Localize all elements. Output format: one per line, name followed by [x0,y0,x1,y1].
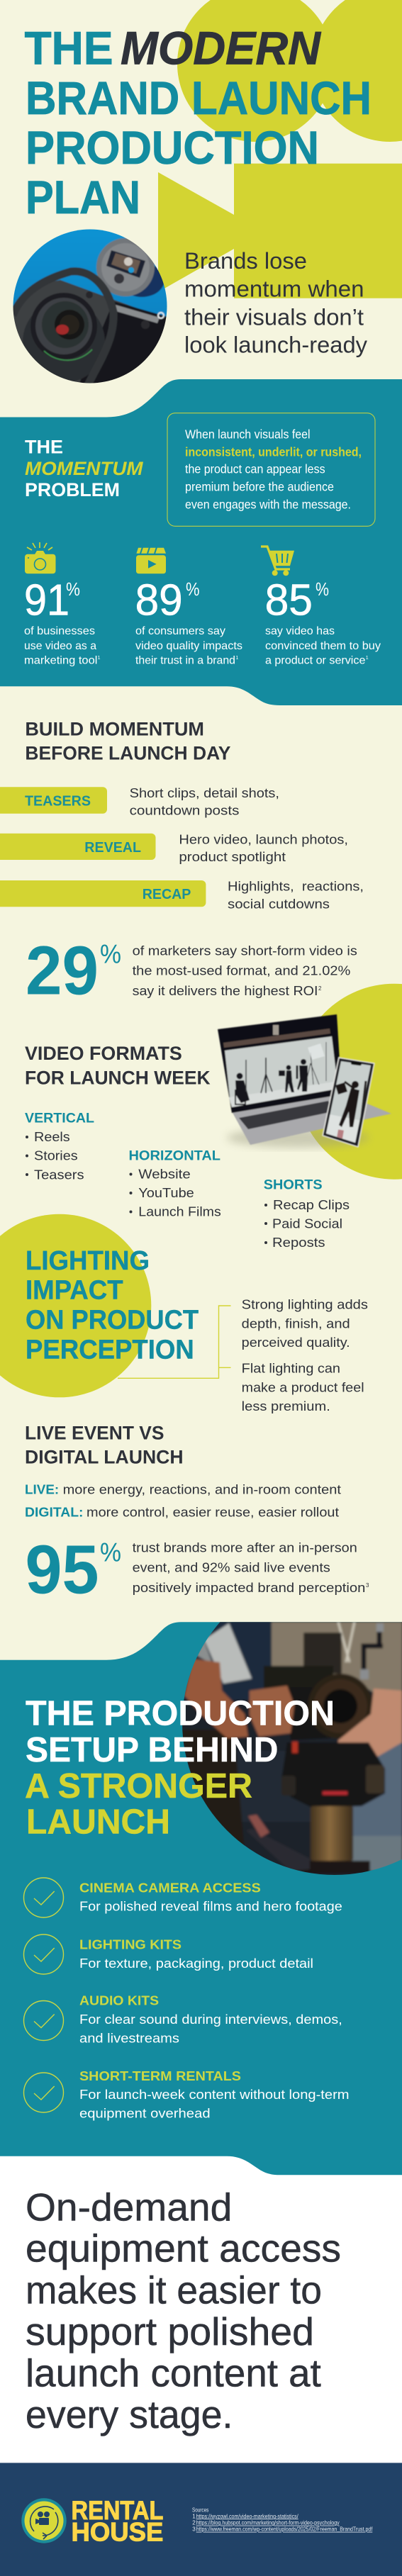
image: camera operator photo [182,1622,402,1875]
hero subheading: look launch-ready [184,332,368,358]
timeline: recap: social cutdowns [228,897,330,912]
momentum heading: MOMENTUM [25,458,143,479]
format list: horizontal: Website [138,1167,191,1182]
format list: vertical: Reels [34,1129,70,1144]
stat: 95 percent: 95 [26,1530,99,1608]
callout box [167,413,375,526]
momentum heading [25,436,143,500]
stat: 89 percent: 89 [135,576,183,625]
hero subheading: momentum when [184,276,364,301]
heading: video formats [25,1043,211,1088]
bracket connector [118,1306,231,1378]
title: PLAN [26,171,140,223]
lighting notes: make a product feel [242,1379,364,1394]
stat: 85 percent: say video has [265,625,335,637]
production heading: A STRONGER [25,1766,252,1805]
sources: https://www.freeman.com/wp-content/uploads/2025/02/Freeman_BrandTrust.pdf [196,2526,373,2533]
timeline: teasers: Short clips, detail shots, [130,785,279,800]
checklist: lighting kits: LIGHTING KITS [79,1937,182,1951]
checklist: short-term rentals: SHORT-TERM RENTALS [79,2068,241,2083]
callout box: When launch visuals feel [185,427,311,442]
stat: 85 percent: 1 [366,656,369,661]
sources [192,2507,373,2533]
stat: 89 percent: video quality impacts [135,640,242,652]
timeline: reveal: REVEAL [84,840,141,856]
checklist: audio kits: AUDIO KITS [79,1993,159,2007]
stat: 89 percent: 1 [235,656,238,661]
heading: live event vs digital: DIGITAL LAUNCH [25,1447,184,1468]
format list: shorts: Paid Social [272,1216,342,1231]
title: THE [24,22,113,74]
hero subheading: their visuals don’t [184,304,364,330]
format list: vertical: Stories [34,1148,78,1163]
hero subheading [184,248,368,358]
lime circle behind lighting heading [0,1214,151,1397]
image: laptop and phone mockup [218,1014,391,1148]
callout box: the product can appear less [185,462,325,476]
title: BRAND LAUNCH [26,72,372,124]
closing statement: support polished [26,2309,314,2353]
logo: rental house: RENTAL [71,2496,163,2525]
stat: 29 percent: 2 [318,985,322,992]
stat: 95 percent [26,1530,369,1608]
stat: 85 percent: 85 [265,576,313,625]
stat: 29 percent [26,932,357,1009]
hero decorative lime shapes [158,0,402,298]
checklist: lighting kits [24,1934,313,1974]
stat: 95 percent: 3 [366,1582,369,1589]
timeline: recap: RECAP [143,887,191,902]
stat: 95 percent: trust brands more after an in-person [133,1540,357,1555]
timeline: recap: Highlights, reactions, [228,879,364,894]
production heading: SETUP BEHIND [26,1730,278,1769]
stat: 29 percent: % [100,939,121,968]
sources: 1 [192,2513,196,2519]
stat: 91 percent: 1 [98,656,101,661]
momentum heading: THE [25,436,63,457]
heading: video formats: VIDEO FORMATS [25,1043,182,1064]
checklist: short-term rentals [24,2068,350,2120]
lighting notes: less premium. [242,1399,330,1413]
panel: production setup [0,1567,402,2175]
heading: lighting impact: LIGHTING [26,1246,150,1276]
icon: clapperboard [136,547,166,573]
checklist: short-term rentals: equipment overhead [79,2105,211,2120]
comparison lines: more energy, reactions, and in-room content [63,1482,341,1496]
heading: live event vs digital [25,1423,184,1468]
comparison lines: DIGITAL: [25,1505,84,1520]
stat: 91 percent: marketing tool [24,655,97,667]
stat: 85 percent: a product or service [265,655,365,667]
closing statement: every stage. [26,2392,233,2436]
heading: build momentum: BEFORE LAUNCH DAY [25,742,231,763]
timeline: reveal: product spotlight [179,849,286,864]
closing statement: launch content at [26,2351,321,2395]
timeline: reveal [0,831,348,864]
icon: shopping cart [261,547,294,576]
stat: 29 percent: 29 [26,932,99,1009]
format list: horizontal: Launch Films [138,1204,221,1219]
format list: shorts [264,1177,350,1250]
stat: 91 percent [24,576,101,667]
hero subheading: Brands lose [184,248,307,274]
lime circle behind devices [296,984,402,1180]
production heading: LAUNCH [26,1803,170,1842]
stat: 91 percent: of businesses [24,625,95,637]
format list: horizontal: YouTube [138,1185,194,1200]
stat: 95 percent: positively impacted brand perception [133,1580,365,1595]
heading: lighting impact: IMPACT [26,1276,123,1306]
checklist: lighting kits: For texture, packaging, product detail [79,1956,313,1971]
format list: shorts: Reposts [272,1235,325,1250]
format list: horizontal: HORIZONTAL [129,1148,220,1164]
closing statement: makes it easier to [26,2268,322,2312]
stat: 89 percent: their trust in a brand [135,655,235,667]
stat: 89 percent: of consumers say [135,625,225,637]
closing statement: On-demand [26,2185,232,2229]
format list: vertical [25,1110,94,1182]
checklist: cinema camera access: For polished reveal films and hero footage [79,1899,342,1914]
closing statement: equipment access [26,2227,341,2270]
checklist: audio kits: For clear sound during interviews, demos, [79,2012,342,2027]
callout box: even engages with the message. [185,497,351,511]
heading: build momentum: BUILD MOMENTUM [25,718,204,739]
checklist: cinema camera access: CINEMA CAMERA ACCESS [79,1880,261,1895]
sources: 3 [192,2526,196,2533]
title: MODERN [121,22,321,74]
heading: lighting impact: PERCEPTION [26,1335,194,1365]
icon: camera [25,542,55,573]
stat: 85 percent: convinced them to buy [265,640,381,652]
sources: 2 [192,2520,196,2526]
momentum heading: PROBLEM [25,479,120,500]
lighting notes: perceived quality. [242,1335,350,1350]
stat: 95 percent: event, and 92% said live events [133,1560,330,1575]
comparison lines: more control, easier reuse, easier rollout [86,1505,339,1520]
comparison lines [25,1482,341,1520]
lighting notes: Flat lighting can [242,1361,340,1376]
lighting notes: depth, finish, and [242,1316,350,1331]
format list: vertical: VERTICAL [25,1110,94,1126]
lighting notes: Strong lighting adds [242,1297,368,1312]
stat: 91 percent: use video as a [24,640,96,652]
timeline: recap [0,879,364,912]
heading: lighting impact: ON PRODUCT [26,1305,199,1335]
title: PRODUCTION [26,121,319,174]
stat: 95 percent: % [100,1538,121,1567]
stat: 29 percent: of marketers say short-form video is [133,943,357,958]
timeline: teasers: TEASERS [25,794,91,810]
checklist: audio kits [24,1993,342,2046]
format list: horizontal [129,1148,221,1219]
heading: build momentum [25,718,231,763]
stat: 89 percent [135,576,242,667]
logo: rental house [21,2496,163,2546]
comparison lines: LIVE: [25,1482,59,1496]
sources: https://blog.hubspot.com/marketing/short-form-video-psychology [196,2520,340,2526]
format list: shorts: SHORTS [264,1177,323,1192]
heading: video formats: FOR LAUNCH WEEK [25,1067,211,1088]
stat: 91 percent: % [66,578,80,600]
logo: rental house: HOUSE [71,2517,163,2546]
timeline: teasers [0,785,279,818]
checklist: audio kits: and livestreams [79,2031,179,2046]
stat: 29 percent: say it delivers the highest ROI [133,983,318,998]
closing statement [26,2185,341,2436]
format list: shorts: Recap Clips [273,1197,350,1212]
stat: 29 percent: the most-used format, and 21.02% [133,963,350,978]
stat: 89 percent: % [186,578,200,600]
checklist: cinema camera access [24,1878,342,1917]
sources: https://wyzowl.com/video-marketing-statistics/ [196,2513,298,2519]
sources: Sources [192,2507,208,2513]
stat: 85 percent: % [316,578,329,600]
timeline: teasers: countdown posts [130,803,239,818]
heading: live event vs digital: LIVE EVENT VS [25,1423,164,1444]
lighting notes [242,1297,368,1413]
callout box: premium before the audience [185,480,334,494]
callout box: inconsistent, underlit, or rushed, [185,444,362,459]
panel: momentum problem [0,379,402,705]
heading: lighting impact [26,1246,199,1365]
stat: 91 percent: 91 [24,576,69,625]
format list: vertical: Teasers [34,1167,84,1182]
production heading: THE PRODUCTION [26,1693,335,1732]
production heading [25,1693,335,1842]
timeline: reveal: Hero video, launch photos, [179,831,348,846]
checklist: short-term rentals: For launch-week content without long-term [79,2087,350,2102]
title [24,22,372,223]
hero photo: cinema camera [11,227,170,386]
stat: 85 percent [265,576,381,667]
panel: footer [0,2463,402,2576]
